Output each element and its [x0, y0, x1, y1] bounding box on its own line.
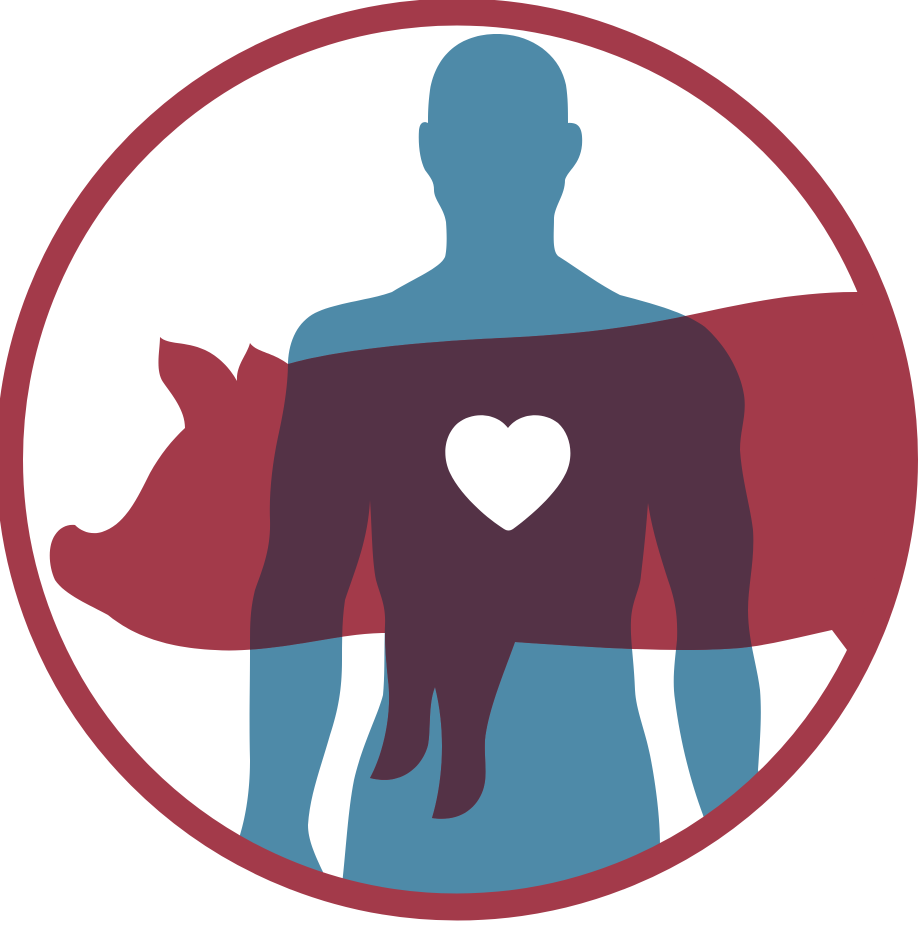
human silhouette — [236, 34, 765, 900]
pig silhouette — [50, 292, 900, 819]
icon: white heart — [445, 415, 570, 530]
overlap of pig and human — [250, 316, 754, 819]
